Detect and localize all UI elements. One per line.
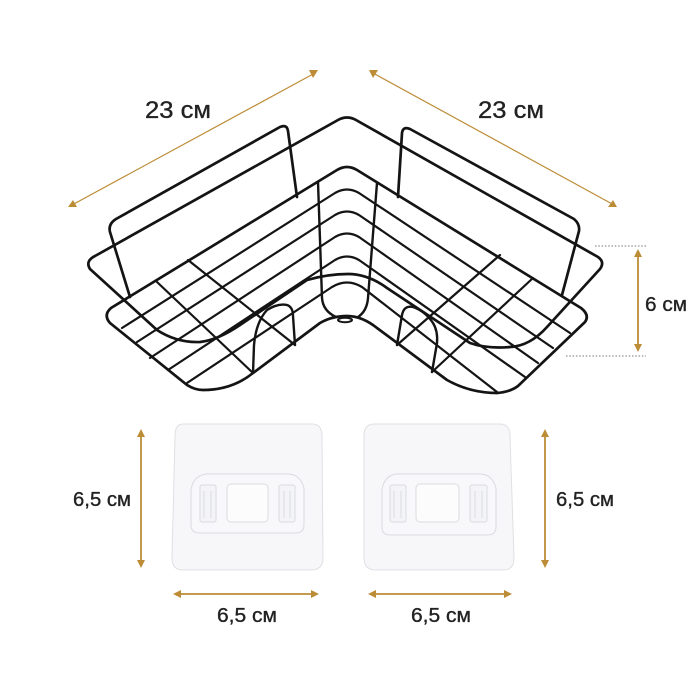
arrow: right pad height	[541, 429, 549, 568]
arrow: height 6 cm	[634, 249, 642, 352]
arrow: left pad height	[137, 429, 145, 568]
arrow: left width 23 cm	[68, 70, 318, 207]
hook plate	[191, 474, 304, 533]
pad sheet	[364, 424, 514, 570]
left back guard	[110, 126, 297, 297]
label: left pad height: 6,5 см	[73, 489, 131, 511]
label: left pad width: 6,5 см	[217, 605, 277, 627]
upper rim rail	[88, 118, 602, 348]
right back guard	[398, 128, 579, 295]
inner curved floor wires	[122, 190, 570, 392]
dimension arrows	[68, 70, 642, 598]
dotted height guides	[566, 246, 647, 356]
wire corner shelf basket	[88, 118, 602, 393]
label: right pad height: 6,5 см	[556, 489, 614, 511]
right front hoop	[397, 307, 437, 372]
arrow: right width 23 cm	[369, 70, 617, 207]
hook plate	[382, 474, 496, 535]
arrow: left pad width	[173, 590, 319, 598]
pad sheet	[172, 424, 323, 570]
basket floor outline	[107, 167, 587, 393]
adhesive pad right	[364, 424, 514, 570]
arrow: right pad width	[368, 590, 512, 598]
mounting hole	[338, 318, 352, 322]
left front hoop	[253, 305, 295, 373]
adhesive pad left	[172, 424, 323, 570]
label: right pad width: 6,5 см	[411, 605, 471, 627]
label: 6 cm: 6 см	[645, 294, 687, 316]
centre back uprights	[318, 182, 336, 317]
label: 23 cm left: 23 см	[145, 97, 211, 124]
label: 23 cm right: 23 см	[478, 97, 544, 124]
floor cross wires	[157, 255, 533, 373]
